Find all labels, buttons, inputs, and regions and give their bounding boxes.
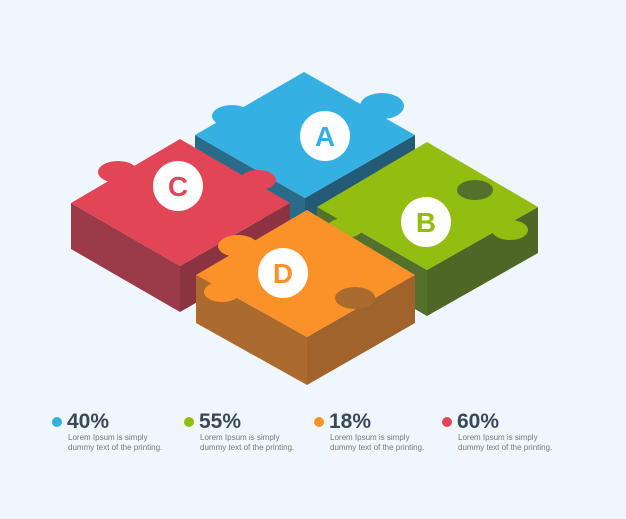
label B: B	[416, 207, 436, 238]
piece A	[195, 72, 415, 243]
label C: C	[168, 171, 188, 202]
label B	[401, 197, 451, 247]
text: dummy text of the printing.	[330, 443, 424, 452]
label C	[153, 161, 203, 211]
stat 18%	[314, 410, 424, 452]
label D: D	[273, 258, 293, 289]
stat 55%	[184, 410, 294, 452]
stat 40%	[52, 410, 162, 452]
text: Lorem Ipsum is simply	[200, 433, 280, 442]
text: 60%	[457, 410, 499, 433]
piece D	[196, 210, 415, 385]
text: dummy text of the printing.	[68, 443, 162, 452]
text: 40%	[67, 410, 109, 433]
label D	[258, 248, 308, 298]
text: dummy text of the printing.	[458, 443, 552, 452]
text: 18%	[329, 410, 371, 433]
text: 55%	[199, 410, 241, 433]
text: dummy text of the printing.	[200, 443, 294, 452]
text: Lorem Ipsum is simply	[458, 433, 538, 442]
piece C	[71, 139, 290, 312]
label A: A	[315, 121, 335, 152]
stat 60%	[442, 410, 552, 452]
text: Lorem Ipsum is simply	[330, 433, 410, 442]
text: Lorem Ipsum is simply	[68, 433, 148, 442]
piece B	[317, 142, 538, 316]
label A	[300, 111, 350, 161]
